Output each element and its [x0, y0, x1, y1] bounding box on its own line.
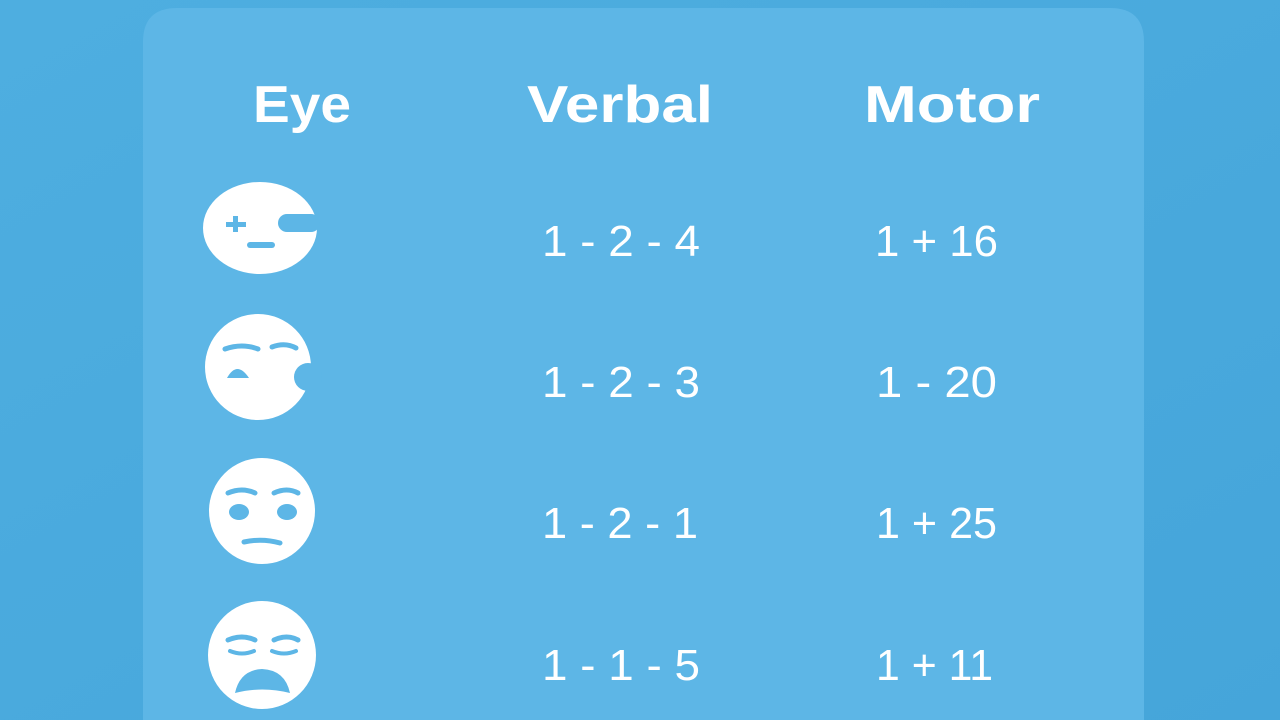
verbal scores: 1 - 2 - 3	[542, 358, 700, 407]
heading: Verbal: Verbal	[527, 76, 713, 134]
icon: face 2	[205, 314, 322, 420]
icon: face 3	[209, 458, 315, 564]
icon: face 1	[203, 182, 320, 274]
heading: Motor: Motor	[864, 76, 1040, 134]
motor scores: 1 - 20	[876, 358, 997, 407]
verbal scores: 1 - 2 - 1	[542, 499, 698, 548]
motor scores	[875, 217, 998, 690]
icon: face 4	[208, 601, 316, 709]
heading: Eye: Eye	[253, 76, 351, 134]
verbal scores	[542, 217, 700, 690]
verbal scores: 1 - 1 - 5	[542, 641, 700, 690]
motor scores: 1 + 25	[876, 499, 997, 548]
motor scores: 1 + 16	[875, 217, 998, 266]
motor scores: 1 + 11	[876, 641, 993, 690]
panel: score table	[143, 8, 1144, 720]
verbal scores: 1 - 2 - 4	[542, 217, 700, 266]
